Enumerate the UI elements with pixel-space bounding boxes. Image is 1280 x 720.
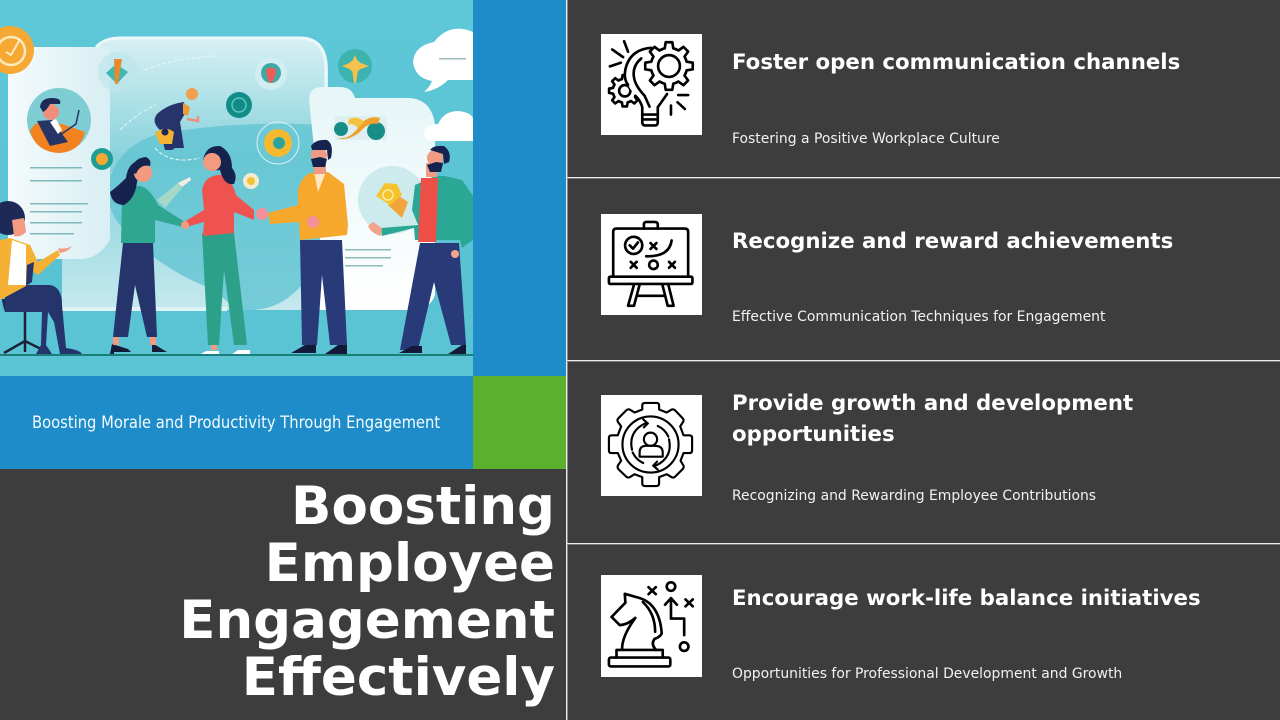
figure: seated woman — [0, 201, 82, 354]
icon: compass badge — [338, 49, 372, 83]
large teal blob — [108, 124, 328, 310]
icon: small green badge — [91, 148, 113, 170]
icon: small flower — [243, 173, 259, 189]
item 2 heading: Recognize and reward achievements — [732, 229, 1173, 254]
icon: teal gear badge — [226, 92, 252, 118]
icon: orange badge — [0, 26, 34, 74]
floor band — [0, 311, 473, 376]
figure: man in teal jacket — [368, 146, 473, 354]
figure: crouching man — [155, 88, 198, 150]
item 3 heading: opportunities — [732, 422, 895, 447]
item 3 heading — [732, 391, 1133, 447]
panel: subtitle band — [0, 376, 473, 469]
right white panel — [309, 87, 435, 310]
panel: item 2 — [601, 214, 1173, 325]
dashed path — [120, 56, 216, 160]
icon: gear with person — [601, 395, 702, 496]
icon: chess knight — [601, 575, 702, 677]
item 2 description: Effective Communication Techniques for Engagement — [732, 309, 1105, 325]
figure: woman in green — [110, 157, 191, 354]
ground line — [0, 354, 473, 356]
icon: man with laptop — [27, 88, 91, 153]
icon: yellow gear badge — [257, 122, 299, 164]
panel: item 3 — [601, 391, 1133, 504]
title — [179, 476, 555, 708]
panel: top right blue block — [473, 0, 566, 376]
panel: item 1 — [601, 34, 1180, 147]
large translucent panel — [62, 37, 328, 310]
icon: lightbulb and gears — [601, 34, 702, 135]
icon: strategy board — [601, 214, 702, 315]
icon: tool badge — [98, 52, 138, 92]
panel: green block — [473, 376, 566, 469]
cloud — [424, 111, 473, 141]
title: Effectively — [242, 647, 555, 708]
figure: man in yellow — [256, 140, 348, 354]
item 3 description: Recognizing and Rewarding Employee Contributions — [732, 488, 1096, 504]
panel: illustration — [0, 0, 473, 376]
speech bubble — [413, 29, 473, 92]
panel: item 4 — [601, 575, 1201, 682]
title: Boosting — [291, 476, 555, 537]
title: Employee — [265, 533, 555, 594]
figure: woman in red — [181, 146, 254, 355]
icon: infinity — [334, 116, 387, 140]
title: Engagement — [179, 590, 555, 651]
white document panel — [8, 47, 110, 259]
item 4 heading: Encourage work-life balance initiatives — [732, 586, 1201, 611]
subtitle text: Boosting Morale and Productivity Through Engagement — [32, 413, 440, 432]
item 3 heading: Provide growth and development — [732, 391, 1133, 416]
vertical divider — [566, 0, 567, 720]
item 1 description: Fostering a Positive Workplace Culture — [732, 131, 1000, 147]
item 4 description: Opportunities for Professional Development and Growth — [732, 666, 1122, 682]
item 1 heading: Foster open communication channels — [732, 50, 1180, 75]
icon: balloon badge — [255, 58, 287, 90]
